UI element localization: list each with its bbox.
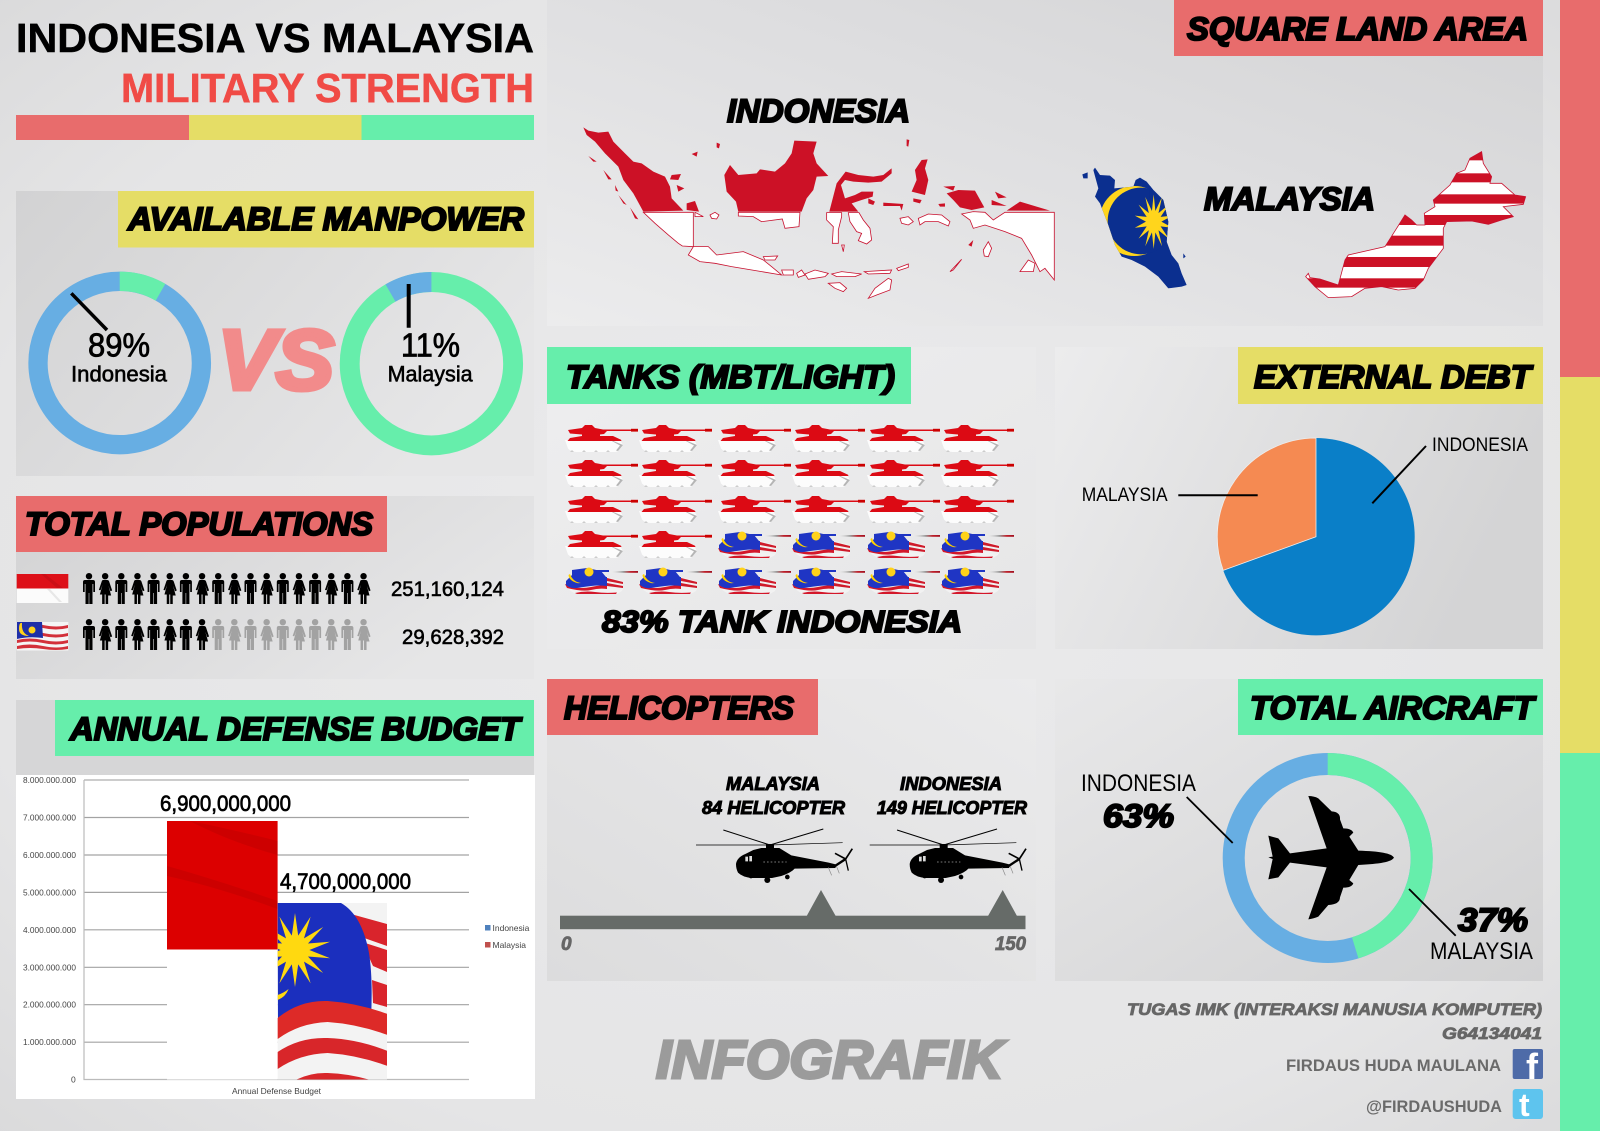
pie chart — [1217, 438, 1415, 635]
bar chart: 1.000.000.000 — [23, 1037, 76, 1047]
indonesia flag icon — [17, 574, 68, 603]
chart legend: Malaysia — [492, 940, 526, 950]
map: indonesia — [583, 127, 1054, 298]
panel: square land area — [583, 0, 1543, 300]
bar: malaysia flag — [278, 903, 387, 1080]
leader and label: indonesia — [1372, 435, 1528, 503]
label: malaysia 37%: MALAYSIA — [1430, 938, 1533, 965]
icon: facebook: f — [1526, 1046, 1539, 1087]
bar chart: 7.000.000.000 — [23, 812, 76, 822]
tank caption: 83% TANK INDONESIA — [602, 604, 962, 639]
title: INDONESIA VS MALAYSIA — [16, 15, 534, 61]
heading: total populations: TOTAL POPULATIONS — [25, 506, 374, 542]
value label indonesia: 6,900,000,000 — [160, 791, 291, 816]
label: malaysia: MALAYSIA — [1204, 181, 1375, 217]
scale bar with markers — [560, 890, 1026, 929]
credit: course: G64134041 — [1442, 1024, 1542, 1043]
bar chart: 4.000.000.000 — [23, 925, 76, 935]
donut: indonesia 89% — [38, 281, 201, 445]
heading: available manpower — [118, 191, 534, 248]
heading: tanks — [547, 347, 911, 404]
panel: helicopters — [547, 679, 1036, 981]
title: MILITARY STRENGTH — [121, 65, 534, 111]
label: malaysia helicopters — [702, 774, 845, 818]
bar: indonesia flag — [167, 821, 278, 1080]
donut chart: aircraft share — [1234, 764, 1422, 952]
heading: helicopters — [547, 679, 818, 735]
donut: malaysia 11%: 11% — [401, 327, 460, 364]
scale label 150: 150 — [995, 934, 1026, 955]
infografik wordmark: INFOGRAFIK — [656, 1030, 1007, 1090]
chart legend — [485, 923, 530, 950]
label: malaysia 37% — [1409, 889, 1533, 965]
title — [16, 15, 534, 111]
heading: annual defense budget: ANNUAL DEFENSE BUDGET — [69, 711, 523, 747]
scale label 0: 0 — [561, 934, 572, 955]
donut: indonesia 89%: Indonesia — [71, 362, 168, 387]
credit: twitter handle: @FIRDAUSHUDA — [1366, 1097, 1502, 1116]
heading: available manpower: AVAILABLE MANPOWER — [127, 201, 524, 237]
icon: facebook — [1513, 1046, 1543, 1087]
panel: total populations — [16, 496, 534, 679]
label: indonesia 63% — [1081, 770, 1233, 843]
credit: course: TUGAS IMK (INTERAKSI MANUSIA KOMPUTER) — [1127, 1000, 1542, 1019]
credit: course — [1127, 1000, 1542, 1043]
label: malaysia helicopters: 84 HELICOPTER — [702, 798, 845, 818]
pictogram row: malaysia population — [83, 619, 371, 650]
heading: square land area — [1174, 0, 1543, 56]
bar chart: 3.000.000.000 — [23, 962, 76, 972]
icon: helicopter indonesia — [870, 829, 1026, 883]
label: indonesia: INDONESIA — [727, 93, 910, 129]
icon: twitter — [1513, 1087, 1543, 1123]
panel: available manpower — [16, 191, 534, 476]
panel: total aircraft — [1055, 679, 1543, 981]
leader and label: malaysia: MALAYSIA — [1082, 485, 1168, 506]
label: indonesia helicopters — [877, 774, 1027, 818]
bar chart: 5.000.000.000 — [23, 887, 76, 897]
heading: tanks: TANKS (MBT/LIGHT) — [566, 359, 895, 395]
icon: helicopter malaysia — [696, 829, 852, 883]
icon: twitter: t — [1519, 1087, 1530, 1123]
label: indonesia 63%: 63% — [1103, 798, 1174, 834]
map: peninsular malaysia — [1082, 165, 1192, 290]
panel: annual defense budget — [16, 700, 535, 1106]
icon: airplane — [1268, 796, 1394, 919]
vs label: VS — [218, 313, 334, 407]
pictogram row: indonesia population — [83, 573, 371, 604]
tank pictogram grid — [565, 425, 1014, 594]
heading: external debt — [1238, 347, 1543, 404]
label: indonesia helicopters: INDONESIA — [900, 774, 1002, 794]
chart legend: Indonesia — [492, 923, 530, 933]
right colour stripe — [1560, 0, 1600, 1131]
population number indonesia: 251,160,124 — [391, 578, 504, 601]
label: indonesia 63%: INDONESIA — [1081, 770, 1196, 797]
heading: external debt: EXTERNAL DEBT — [1254, 359, 1534, 395]
credit: author: FIRDAUS HUDA MAULANA — [1286, 1056, 1501, 1075]
heading: total aircraft — [1238, 679, 1543, 735]
bar chart: 2.000.000.000 — [23, 1000, 76, 1010]
malaysia flag icon — [17, 622, 68, 650]
bar chart: 8.000.000.000 — [23, 775, 76, 785]
bar chart: 0 — [71, 1074, 76, 1084]
panel: tanks — [547, 347, 1036, 649]
heading: square land area: SQUARE LAND AREA — [1187, 11, 1528, 47]
map: east malaysia — [1302, 150, 1528, 300]
bar chart — [16, 775, 535, 1106]
title colour bar — [16, 115, 534, 140]
x axis label: Annual Defense Budget — [232, 1086, 322, 1096]
heading: helicopters: HELICOPTERS — [564, 690, 795, 726]
heading: total populations — [16, 496, 387, 552]
donut: malaysia 11% — [350, 282, 513, 445]
label: malaysia helicopters: MALAYSIA — [726, 774, 820, 794]
donut: malaysia 11%: Malaysia — [388, 362, 473, 387]
label: indonesia helicopters: 149 HELICOPTER — [877, 798, 1027, 818]
bar chart: 6.000.000.000 — [23, 850, 76, 860]
heading: total aircraft: TOTAL AIRCRAFT — [1250, 690, 1537, 726]
value label malaysia: 4,700,000,000 — [280, 869, 411, 894]
panel: external debt — [1055, 347, 1543, 649]
donut: indonesia 89%: 89% — [88, 327, 150, 364]
population number malaysia: 29,628,392 — [402, 626, 504, 649]
leader and label: indonesia: INDONESIA — [1432, 435, 1528, 456]
heading: annual defense budget — [55, 700, 534, 756]
label: malaysia 37%: 37% — [1458, 902, 1528, 938]
